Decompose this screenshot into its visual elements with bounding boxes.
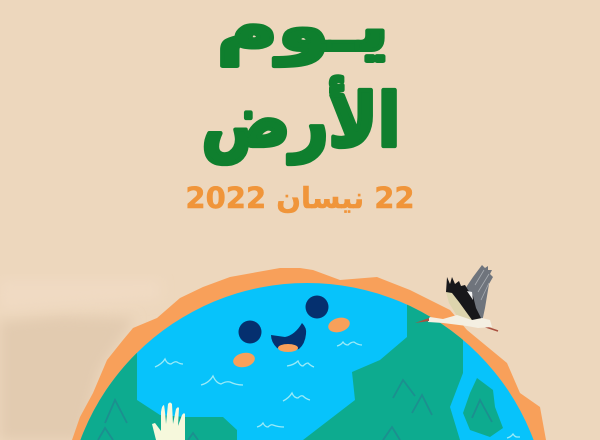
date: 22 نيسان 2022	[185, 181, 415, 215]
icon: flying stork	[415, 265, 498, 331]
globe orange rim	[72, 268, 546, 440]
mouth	[271, 323, 306, 352]
right cheek	[327, 315, 351, 335]
title line 2: الأرض	[202, 77, 400, 165]
far wing	[463, 265, 493, 322]
title: يوم الأرض	[202, 0, 400, 165]
island	[463, 378, 503, 437]
face	[232, 296, 351, 369]
left cheek	[232, 351, 256, 369]
left continent	[80, 353, 237, 440]
bird body and head	[428, 315, 492, 328]
centre continent	[303, 304, 463, 440]
tongue	[278, 344, 298, 352]
bird legs	[474, 323, 498, 331]
icon: raised hand	[152, 402, 185, 440]
right eye	[306, 296, 328, 318]
wing feather lines	[475, 270, 489, 300]
ocean and land	[60, 280, 550, 440]
near wing cream	[446, 292, 472, 320]
mountains	[98, 380, 492, 440]
near wing black	[446, 277, 483, 322]
left eye	[238, 320, 262, 344]
beak	[415, 318, 429, 323]
globe	[60, 268, 550, 440]
waves	[155, 342, 520, 438]
ocean	[60, 280, 550, 440]
white wing patch	[467, 291, 473, 300]
